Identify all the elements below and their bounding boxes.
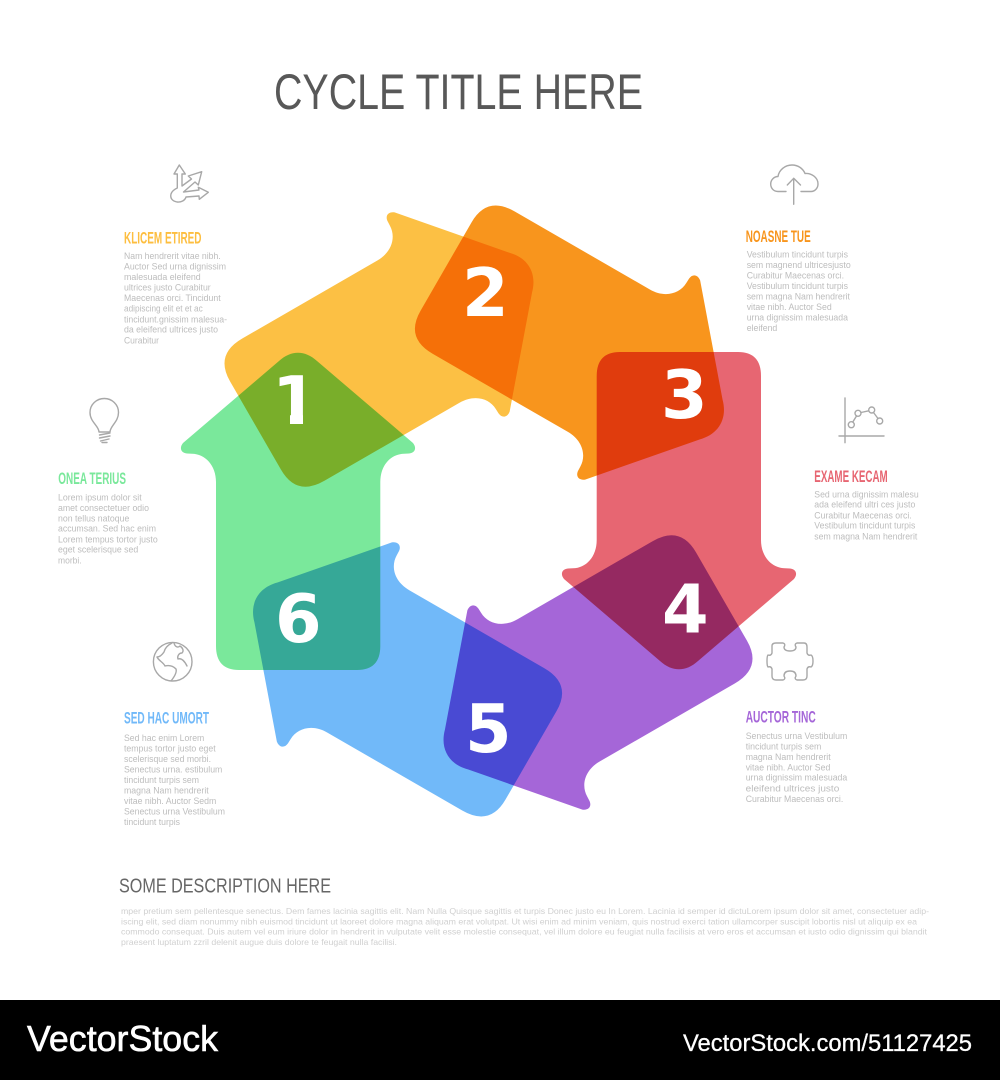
footer bar [0, 1000, 1000, 1080]
panel: step 3 [814, 398, 919, 541]
text block: Maecenas orci. Tincidunt [124, 293, 221, 303]
text block: tincidunt turpis [124, 817, 180, 827]
text block: urna dignissim malesuada [747, 313, 848, 323]
text block: malesuada eleifend [124, 272, 201, 282]
text block: da eleifend ultrices justo [124, 325, 218, 335]
text block [124, 251, 227, 345]
arrow 5: blue [198, 496, 589, 857]
text block: Nam hendrerit vitae nibh. [124, 251, 221, 261]
text block [124, 733, 225, 827]
icon: puzzle piece [767, 643, 813, 680]
text block: sem magnend ultricesjusto [747, 260, 851, 270]
icon: cloud upload [771, 165, 818, 204]
number 4: 4 [662, 570, 709, 648]
text block: non tellus natoque [58, 513, 129, 523]
number 3: 3 [661, 356, 708, 434]
footer url: VectorStock.com/51127425 [683, 1030, 972, 1057]
panel: step 2 [746, 165, 851, 333]
text block: Lorem tempus tortor justo [58, 534, 158, 544]
text block: Vestibulum tincidunt turpis [814, 521, 916, 531]
description text: mper pretium sem pellentesque senectus. Dem fames lacinia sagittis elit. Nam Nulla Quisque sagittis et turpis Donec justo eu In Lorem. Lacinia id semper id dictuLorem ipsum dolor sit amet, consectetuer adip- [121, 906, 929, 916]
text block: vitae nibh. Auctor Sedm [124, 796, 216, 806]
heading: EXAME KECAM [814, 467, 888, 486]
text block: tempus tortor justo eget [124, 744, 216, 754]
arrow 3: red [562, 352, 796, 669]
panel: step 1 [124, 165, 227, 345]
text block: Auctor Sed urna dignissim [124, 262, 226, 272]
text block: sem magna Nam hendrerit [747, 292, 850, 302]
text block: magna Nam hendrerit [124, 785, 209, 795]
text block: Lorem ipsum dolor sit [58, 492, 142, 502]
description text: commodo consequat. Duis autem vel eum iriure dolor in hendrerit in vulputate velit esse molestie consequat, vel illum dolore eu feugiat nulla facilisis at vero eros et accumsan et iusto odio dignissim qui blandit [121, 927, 928, 937]
text block [746, 731, 847, 804]
number 2: 2 [462, 254, 509, 332]
text block: eget scelerisque sed [58, 545, 138, 555]
text block: Sed urna dignissim malesu [814, 489, 919, 499]
text block: Curabitur Maecenas orci. [814, 510, 912, 520]
number 1: 1 [272, 362, 319, 440]
icon: globe [153, 642, 192, 681]
text block: accumsan. Sed hac enim [58, 524, 156, 534]
text block [814, 489, 919, 541]
heading: KLICEM ETIRED [124, 228, 202, 248]
cycle diagram [181, 165, 796, 857]
icon: split arrows [171, 165, 208, 202]
arrow 4: purple [389, 495, 780, 856]
heading: ONEA TERIUS [58, 469, 126, 488]
text block: Senectus urna. estibulum [124, 764, 222, 774]
text block: Vestibulum tincidunt turpis [747, 250, 848, 260]
panel: step 5 [124, 642, 225, 827]
panel: step 6 [58, 398, 158, 565]
text block: ada eleifend ultri ces justo [814, 500, 915, 510]
text block: Senectus urna Vestibulum [746, 731, 847, 741]
description text: iscing elit, sed diam nonummy nibh euismod tincidunt ut laoreet dolore magna aliquam erat volutpat. Ut wisi enim ad minim veniam, quis nostrud exerci tation ullamcorper suscipit lobortis nisl ut aliquip ex ea [121, 916, 917, 926]
text block: sem magna Nam hendrerit [814, 531, 918, 541]
heading: SED HAC UMORT [124, 708, 209, 727]
title: CYCLE TITLE HERE [274, 64, 643, 120]
text block: amet consectetuer odio [58, 503, 149, 513]
arrow 1: yellow [197, 166, 588, 527]
text block: tincidunt turpis sem [124, 775, 199, 785]
text block: tincidunt.gnissim malesua- [124, 314, 227, 324]
text block [58, 492, 158, 565]
text block: vitae nibh. Auctor Sed [747, 302, 832, 312]
arrow 2: orange [388, 165, 779, 526]
text block: scelerisque sed morbi. [124, 754, 211, 764]
description text [121, 906, 929, 947]
number 5: 5 [465, 690, 512, 768]
text block: eleifend [747, 323, 777, 333]
text block [747, 250, 851, 333]
icon: line chart [839, 398, 884, 443]
text block: ultrices justo Curabitur [124, 283, 211, 293]
description text: praesent luptatum zzril delenit augue duis dolore te feugait nulla facilisi. [121, 937, 397, 947]
text block: Sed hac enim Lorem [124, 733, 204, 743]
text block: eleifend ultrices justo [746, 783, 839, 793]
description heading: SOME DESCRIPTION HERE [119, 876, 331, 898]
number 6: 6 [275, 580, 322, 658]
text block: Senectus urna Vestibulum [124, 806, 225, 816]
panel: step 4 [746, 643, 847, 804]
text block: magna Nam hendrerit [746, 752, 831, 762]
text block: Vestibulum tincidunt turpis [747, 281, 848, 291]
heading: AUCTOR TINC [746, 708, 816, 727]
text block: Curabitur [124, 335, 159, 345]
description [119, 876, 929, 947]
text block: vitae nibh. Auctor Sed [746, 762, 830, 772]
text block: Curabitur Maecenas orci. [746, 794, 843, 804]
footer logo: VectorStock [27, 1018, 219, 1059]
icon: light bulb [90, 398, 118, 442]
text block: morbi. [58, 555, 82, 565]
text block: Curabitur Maecenas orci. [747, 271, 844, 281]
text block: tincidunt turpis sem [746, 742, 821, 752]
text block: urna dignissim malesuada [746, 773, 847, 783]
arrow 6: green [181, 353, 415, 670]
heading: NOASNE TUE [746, 227, 811, 246]
text block: adipiscing elit et et ac [124, 304, 203, 314]
